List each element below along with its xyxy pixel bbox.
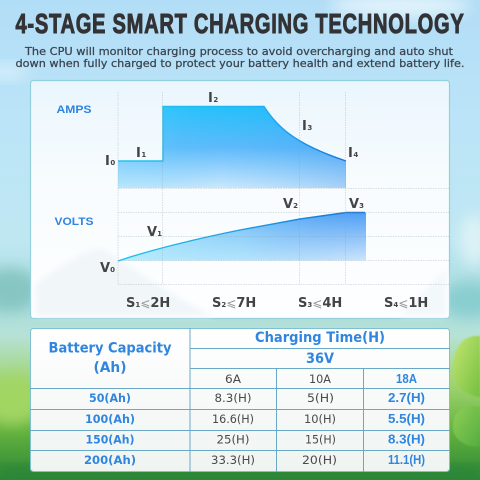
current stage labels: I4 [348,146,358,161]
table column: capacity: 100(Ah) [85,412,135,426]
table column: 10A [302,372,337,467]
stage durations: S2⩽7H [212,296,256,311]
axis label: VOLTS: VOLTS [54,216,94,228]
voltage stage labels [100,197,364,276]
table column: 10A: 5(H) [307,391,334,405]
voltage stage labels: V0 [100,261,115,276]
voltage stage labels: V2 [283,197,298,212]
voltage stage labels: V1 [147,225,162,240]
description text [16,45,464,70]
table header: battery capacity [48,340,172,376]
icon: green leaves [453,336,480,446]
table column: 18A: 8.3(H) [388,432,425,446]
stage durations: S1⩽2H [126,296,170,311]
table column: 6A [211,372,255,467]
stage durations: S4⩽1H [384,296,428,311]
table header: voltage: 36V [306,351,334,367]
axis label: AMPS: AMPS [56,104,92,116]
stage durations: S3⩽4H [298,296,342,311]
table column: capacity: 150(Ah) [86,432,134,446]
voltage stage labels: V3 [349,197,364,212]
table column: 10A: 20(H) [302,453,337,467]
table column: 10A: 15(H) [305,432,336,446]
table column: 18A: 2.7(H) [388,390,425,405]
current stage labels: I0 [105,154,115,169]
table column: 18A: 18A [396,371,418,386]
description text: The CPU will monitor charging process to avoid overcharging and auto shut [24,45,454,58]
table column: 6A: 25(H) [216,432,250,446]
table header: battery capacity: (Ah) [94,360,126,376]
table column: 10A: 10A [309,372,331,386]
current stage labels: I2 [208,91,218,106]
volts area and line [118,212,366,261]
current stage labels: I1 [136,146,146,161]
table column: 18A [388,371,425,467]
table column: 18A: 5.5(H) [388,411,425,426]
current stage labels [105,91,358,169]
current stage labels: I3 [302,119,312,134]
description text: down when fully charged to protect your battery health and extend battery life. [16,57,464,70]
table column: 18A: 11.1(H) [388,452,425,467]
table column: capacity [84,391,136,467]
table column: capacity: 200(Ah) [84,453,136,467]
table column: capacity: 50(Ah) [89,391,131,405]
stage durations [126,296,428,311]
table header: charging time: Charging Time(H) [255,330,385,346]
table column: 6A: 33.3(H) [211,453,255,467]
panel: charging time table [30,328,450,472]
table header: battery capacity: Battery Capacity [48,340,172,356]
table column: 6A: 8.3(H) [214,391,252,405]
panel: charging curves chart [30,80,450,318]
table column: 6A: 6A [225,372,241,386]
table column: 10A: 10(H) [304,412,336,426]
table column: 6A: 16.6(H) [212,412,254,426]
amps area and line [118,106,346,188]
